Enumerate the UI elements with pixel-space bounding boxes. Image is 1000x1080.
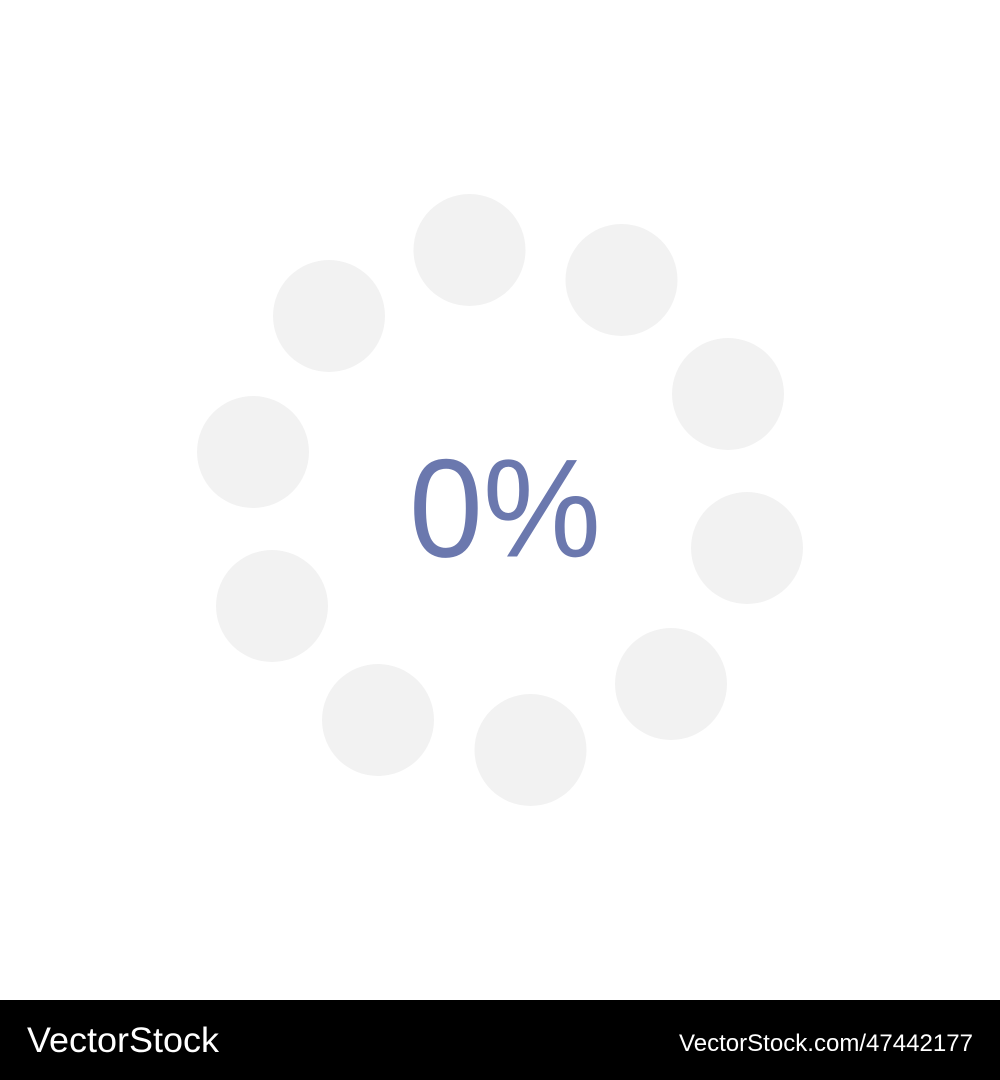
footer brand name: VectorStock [27, 1021, 220, 1060]
footer image id: VectorStock.com/47442177 [679, 1030, 973, 1057]
percentage label: 0% [409, 430, 601, 586]
footer bar [0, 1000, 1000, 1080]
ring of ten progress dots [197, 194, 803, 806]
